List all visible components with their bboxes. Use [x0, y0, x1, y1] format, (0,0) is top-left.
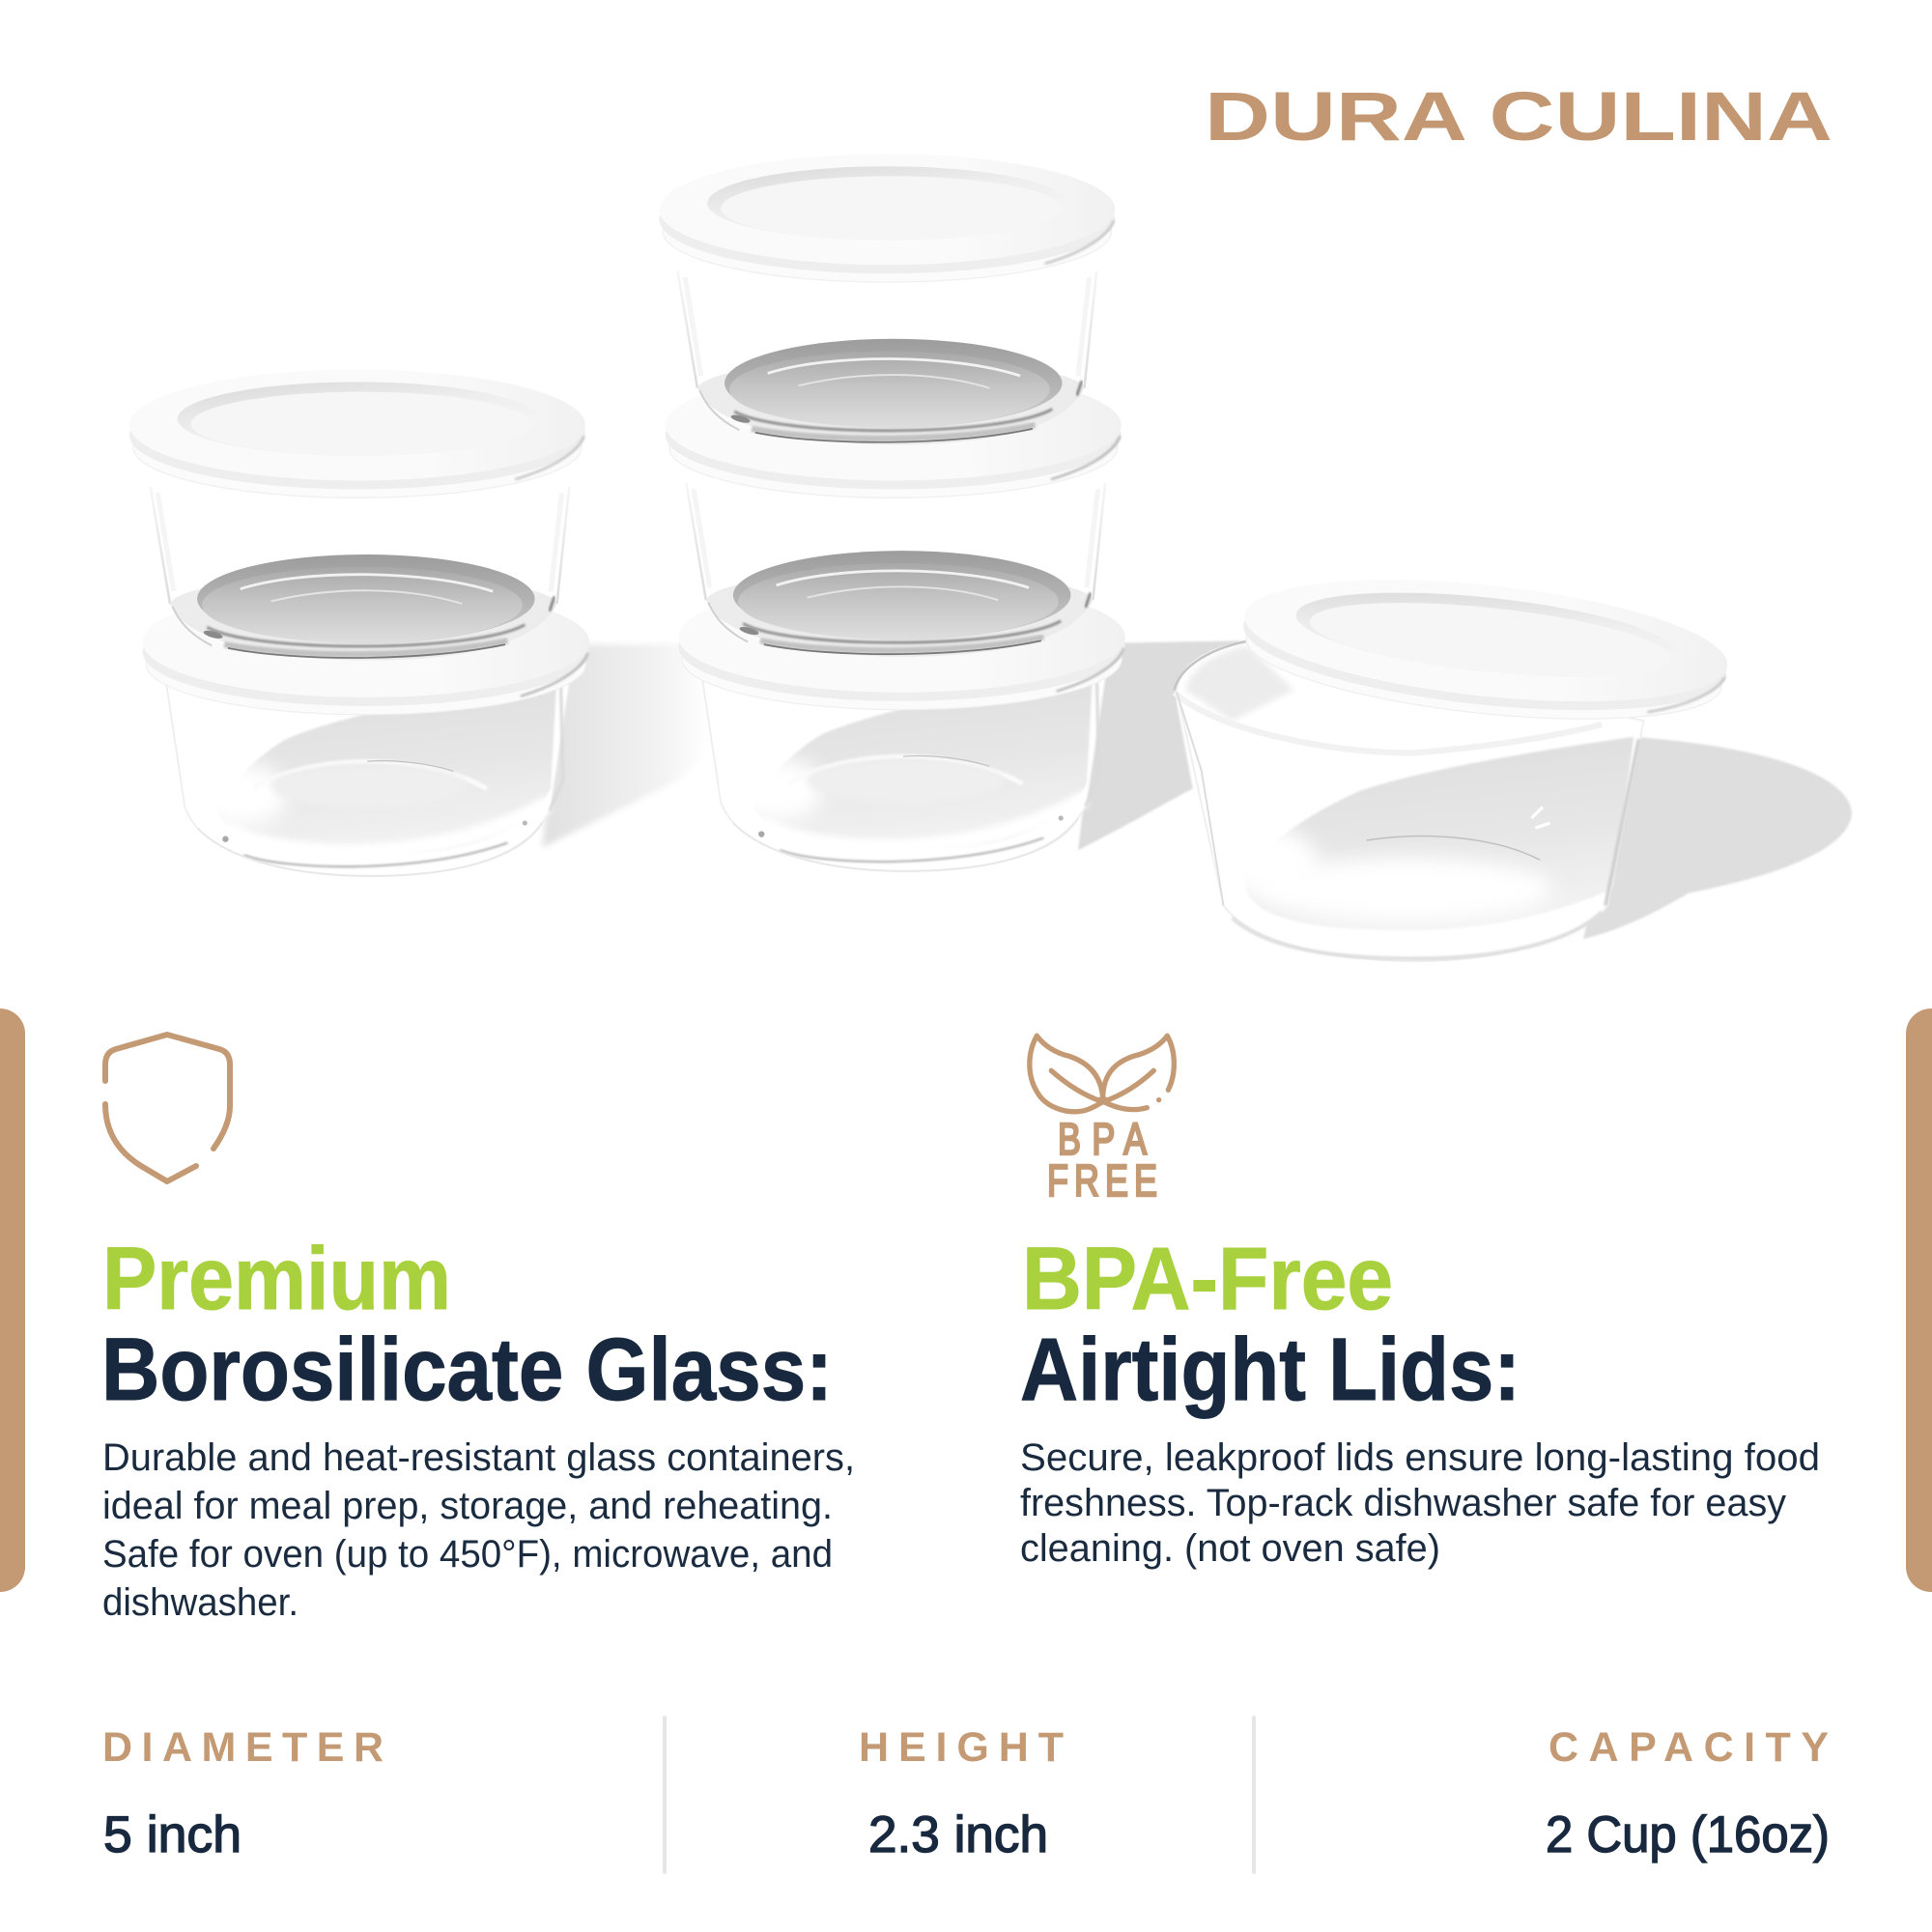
open container with tilted lid: [1175, 560, 1733, 961]
stat: capacity: 2 Cup (16oz): [1546, 1806, 1830, 1863]
brand title: DURA CULINA: [1205, 79, 1833, 156]
icon: BPA free leaves: [1030, 1036, 1174, 1206]
text block: glass description: [102, 1436, 855, 1624]
icon: shield: [105, 1035, 230, 1181]
stat: diameter: 5 inch: [103, 1806, 242, 1863]
heading: BPA-free airtight lids: [1020, 1230, 1520, 1419]
side bar: left accent: [0, 1009, 25, 1592]
text block: glass description: Durable and heat-resistant glass containers,: [102, 1436, 855, 1479]
side bar: right accent: [1906, 1009, 1932, 1592]
stat: height: 2.3 inch: [868, 1806, 1048, 1863]
stat: diameter: [102, 1724, 384, 1863]
stat: height: [859, 1724, 1064, 1863]
text block: glass description: ideal for meal prep, storage, and reheating.: [102, 1485, 833, 1527]
shadow: right of open container: [1583, 737, 1852, 939]
heading: premium borosilicate glass: Premium: [102, 1230, 451, 1328]
text block: lid description: Secure, leakproof lids ensure long-lasting food: [1020, 1436, 1820, 1479]
text block: glass description: dishwasher.: [102, 1581, 298, 1624]
stat: capacity: [1546, 1724, 1830, 1863]
product photo: glass containers with lids: [129, 154, 1852, 961]
divider lines: [663, 1716, 667, 1874]
shadow: between middle stack and open container: [1078, 640, 1247, 850]
icon text: FREE: FREE: [1047, 1156, 1157, 1206]
heading: BPA-free airtight lids: BPA-Free: [1022, 1230, 1393, 1328]
text block: lid description: [1020, 1436, 1820, 1570]
text block: lid description: cleaning. (not oven safe): [1020, 1527, 1440, 1570]
icon text: BPA: BPA: [1058, 1115, 1147, 1164]
stat: diameter: DIAMETER: [102, 1724, 384, 1771]
shadow: between left and middle stacks: [542, 644, 708, 848]
text block: lid description: freshness. Top-rack dishwasher safe for easy: [1020, 1482, 1786, 1524]
stat: height: HEIGHT: [859, 1724, 1064, 1771]
container stack: middle: [659, 154, 1125, 871]
heading: premium borosilicate glass: [101, 1230, 833, 1419]
heading: BPA-free airtight lids: Airtight Lids:: [1020, 1321, 1520, 1419]
text block: glass description: Safe for oven (up to 450°F), microwave, and: [102, 1533, 833, 1576]
stat: capacity: CAPACITY: [1548, 1724, 1829, 1771]
container stack: left: [129, 370, 589, 876]
heading: premium borosilicate glass: Borosilicate Glass:: [101, 1321, 833, 1419]
